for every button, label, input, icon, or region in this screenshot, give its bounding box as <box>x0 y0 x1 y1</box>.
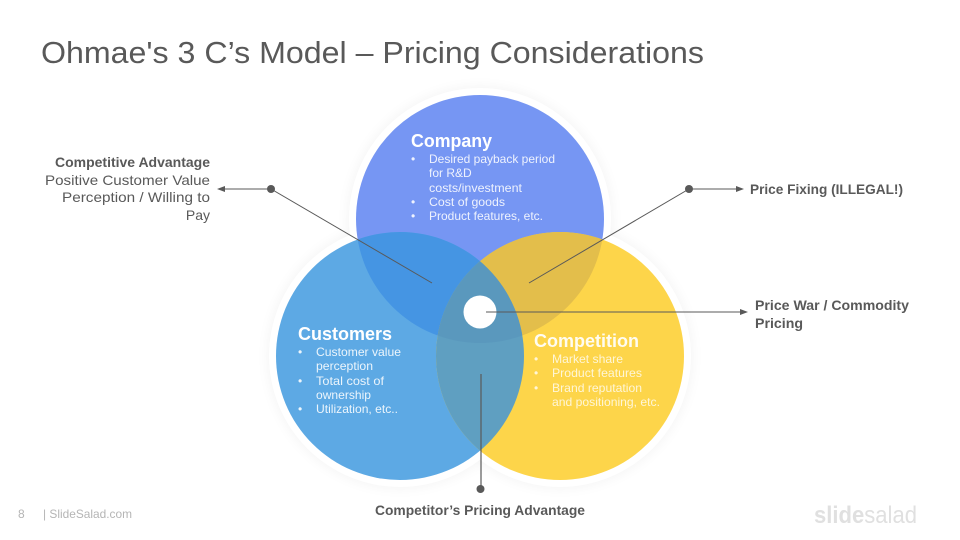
text: customers: • <box>298 345 302 359</box>
footer: site: | SlideSalad.com <box>43 507 132 521</box>
text: company: Cost of goods <box>429 195 505 209</box>
overlap: all three <box>438 261 522 336</box>
text: company <box>411 131 555 223</box>
text: competition: • <box>534 381 538 395</box>
overlap: company and customers <box>358 232 480 336</box>
text: competition: • <box>534 366 538 380</box>
text: company: costs/investment <box>429 181 523 195</box>
title: Ohmae's 3 C’s Model – Pricing Considerations <box>41 35 704 70</box>
text: competition: • <box>534 352 538 366</box>
label: competitive advantage: Competitive Advantage <box>55 154 210 170</box>
circle: company <box>356 95 604 343</box>
connector: price war <box>486 309 748 315</box>
text: competition: Market share <box>552 352 623 366</box>
logo: slidesalad: slidesalad <box>814 502 917 529</box>
text: customers: perception <box>316 359 373 373</box>
circle: customers <box>276 232 524 480</box>
text: customers: Customer value <box>316 345 401 359</box>
label: competitive advantage <box>45 154 210 223</box>
overlap: company and competition <box>438 232 602 336</box>
connector: competitor's pricing advantage <box>476 374 484 493</box>
venn diagram <box>269 88 691 487</box>
text: company: for R&D <box>429 166 472 180</box>
label: price war: Pricing <box>755 315 803 331</box>
label: competitive advantage: Pay <box>186 207 210 223</box>
center circle <box>464 296 496 328</box>
text: customers: • <box>298 374 302 388</box>
text: customers: • <box>298 402 302 416</box>
label: competitive advantage: Perception / Willing to <box>62 189 210 205</box>
text: customers: Total cost of <box>316 374 385 388</box>
label: price fixing: Price Fixing (ILLEGAL!) <box>750 181 903 197</box>
text: competition: and positioning, etc. <box>552 395 660 409</box>
text: customers: ownership <box>316 388 371 402</box>
footer: page number: 8 <box>18 507 25 521</box>
text: company: Product features, etc. <box>429 209 543 223</box>
label: competitor's pricing advantage: Competitor’s Pricing Advantage <box>375 502 585 518</box>
overlap: customers and competition <box>436 261 524 450</box>
label: price war: Price War / Commodity <box>755 297 909 313</box>
text: company: Company <box>411 131 492 151</box>
text: company: Desired payback period <box>429 152 555 166</box>
text: customers <box>298 324 401 416</box>
white rings <box>269 88 691 487</box>
connector: competitive advantage <box>217 185 432 283</box>
text: competition: Product features <box>552 366 642 380</box>
text: company: • <box>411 152 415 166</box>
text: company: • <box>411 195 415 209</box>
text: customers: Utilization, etc.. <box>316 402 398 416</box>
text: competition: Brand reputation <box>552 381 642 395</box>
text: company: • <box>411 209 415 223</box>
label: price war <box>755 297 909 331</box>
circle: competition <box>436 232 684 480</box>
connector: price fixing <box>529 185 744 283</box>
text: customers: Customers <box>298 324 392 344</box>
label: competitive advantage: Positive Customer Value <box>45 172 210 188</box>
circle shadows <box>269 88 691 487</box>
text: competition: Competition <box>534 331 639 351</box>
text: competition <box>534 331 660 409</box>
